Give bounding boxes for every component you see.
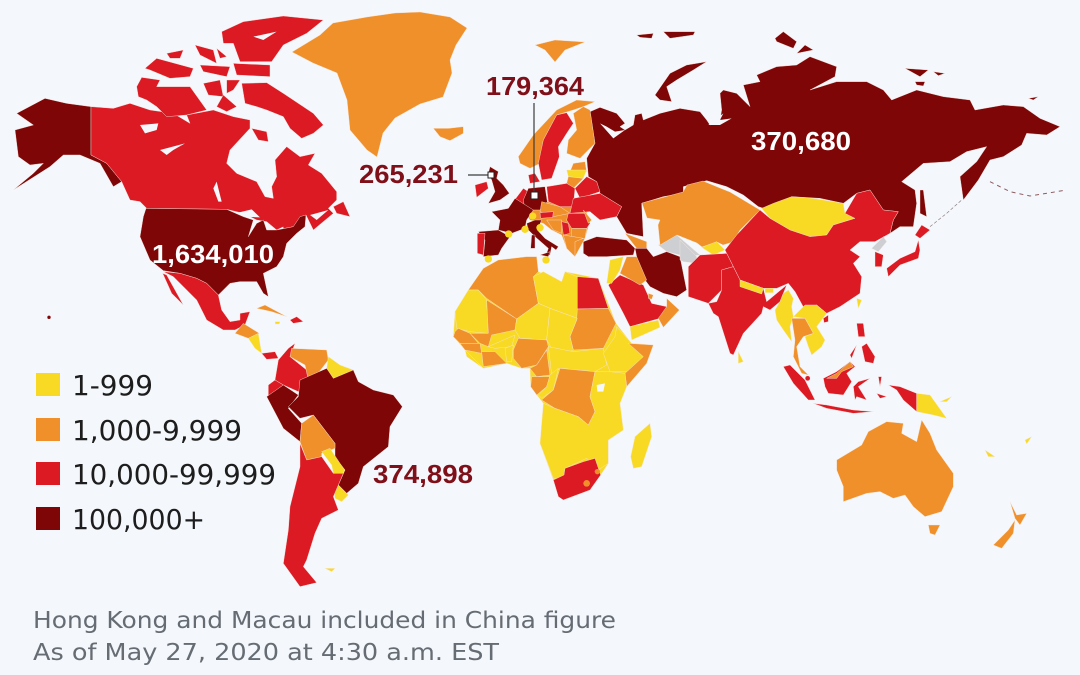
legend: 1-999	[72, 369, 153, 402]
region: Greenland	[292, 12, 467, 157]
region: Russia	[587, 32, 1067, 237]
callout: 179,364 Germany	[486, 71, 585, 199]
region: Asia and Oceania	[680, 190, 1032, 548]
callout: 265,231 UK	[359, 159, 494, 189]
callout: 265,231 UK: 265,231	[359, 159, 458, 189]
label: Russia: 370,680	[751, 126, 851, 156]
region: Svalbard	[535, 40, 585, 62]
legend: 100,000+	[72, 503, 205, 536]
legend: 1,000-9,999	[72, 414, 242, 447]
footnote: As of May 27, 2020 at 4:30 a.m. EST	[33, 640, 500, 666]
footnote: Hong Kong and Macau included in China figure	[33, 608, 616, 634]
region: North America	[13, 16, 350, 330]
label: Brazil: 374,898	[373, 459, 473, 489]
legend: 10,000-99,999	[72, 458, 276, 491]
callout: 179,364 Germany: 179,364	[486, 71, 585, 101]
region: Europe and Middle East	[433, 100, 700, 297]
region: Latin America	[235, 305, 402, 587]
footnote	[33, 608, 616, 666]
label: USA: 1,634,010	[152, 239, 274, 269]
region: Central Asia	[642, 181, 760, 247]
legend	[36, 369, 276, 536]
region: Africa and Arabia	[453, 257, 679, 500]
